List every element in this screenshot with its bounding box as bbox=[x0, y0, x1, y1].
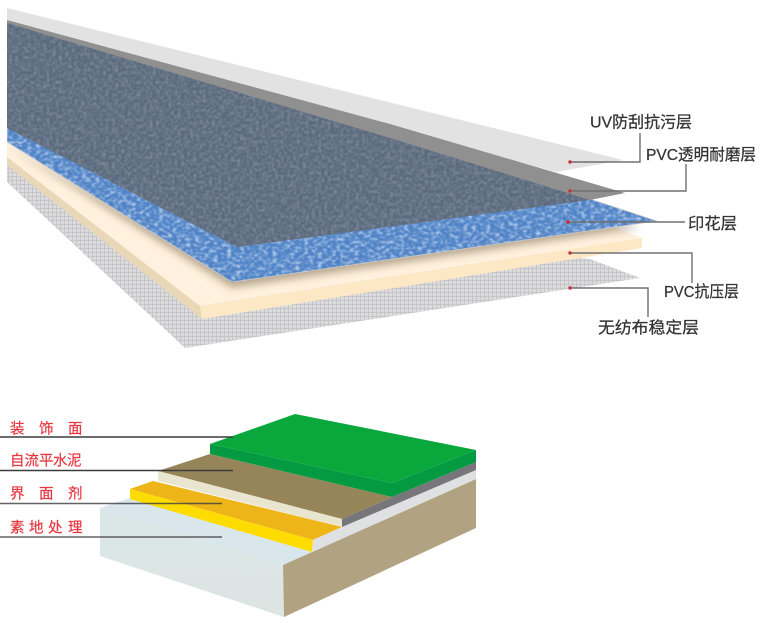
leader lines and markers: vinyl layers bbox=[566, 133, 692, 317]
panel: vinyl floor layers bbox=[7, 8, 657, 348]
self-levelling cement: top bbox=[158, 454, 392, 519]
base: front face bbox=[100, 508, 284, 617]
label: PVC compression layer: PVC抗压层 bbox=[664, 283, 739, 301]
leader: non-woven layer bbox=[570, 288, 648, 317]
layer: textured dark surface bbox=[7, 23, 590, 247]
primer: front bbox=[130, 489, 313, 552]
layer: PVC compression cream top bbox=[7, 140, 642, 306]
layer: PVC compression cream front bbox=[200, 238, 642, 319]
leader: print layer bbox=[568, 221, 685, 223]
label: print layer: 印花层 bbox=[688, 215, 737, 233]
labels: vinyl layers bbox=[590, 114, 756, 337]
line: base treatment bbox=[0, 536, 222, 538]
decorative surface: left side bbox=[210, 444, 392, 497]
line: decorative surface bbox=[0, 436, 233, 438]
line: primer bbox=[0, 502, 222, 504]
labels: construction bbox=[10, 420, 83, 536]
self-levelling cement: front bbox=[158, 471, 342, 527]
base: right side bbox=[283, 479, 476, 617]
markers: red dots bbox=[566, 160, 572, 290]
decorative surface: right side bbox=[392, 450, 476, 497]
layer: UV scratch-resistant film bbox=[7, 8, 623, 172]
shadow under print layer bbox=[7, 146, 640, 288]
decorative surface: top bbox=[210, 414, 476, 483]
label: base treatment: 素地处理 bbox=[10, 520, 83, 536]
label: UV layer: UV防刮抗污层 bbox=[590, 114, 692, 132]
base: top surface bbox=[100, 498, 312, 565]
label: primer: 界面剂 bbox=[10, 486, 82, 502]
layer: PVC compression cream side bbox=[7, 150, 202, 319]
leader lines: construction bbox=[0, 437, 233, 537]
layer: non-woven stabilising gauze bbox=[7, 158, 640, 348]
label: self-levelling cement: 自流平水泥 bbox=[10, 452, 82, 470]
layer: blue print layer bbox=[7, 128, 657, 282]
leader: PVC compression layer bbox=[570, 253, 692, 283]
label: PVC clear layer: PVC透明耐磨层 bbox=[646, 146, 756, 164]
leader: UV layer bbox=[570, 133, 640, 162]
panel: floor construction cross-section bbox=[100, 414, 476, 617]
primer: top bbox=[130, 481, 342, 540]
leader: PVC clear layer bbox=[570, 164, 686, 191]
light grey band bbox=[312, 470, 476, 552]
label: decorative surface: 装饰面 bbox=[10, 420, 82, 438]
layer: PVC clear wear layer bbox=[7, 20, 625, 200]
label: non-woven layer: 无纺布稳定层 bbox=[598, 319, 699, 337]
grey band bbox=[342, 462, 476, 527]
line: self-levelling cement bbox=[0, 470, 233, 472]
